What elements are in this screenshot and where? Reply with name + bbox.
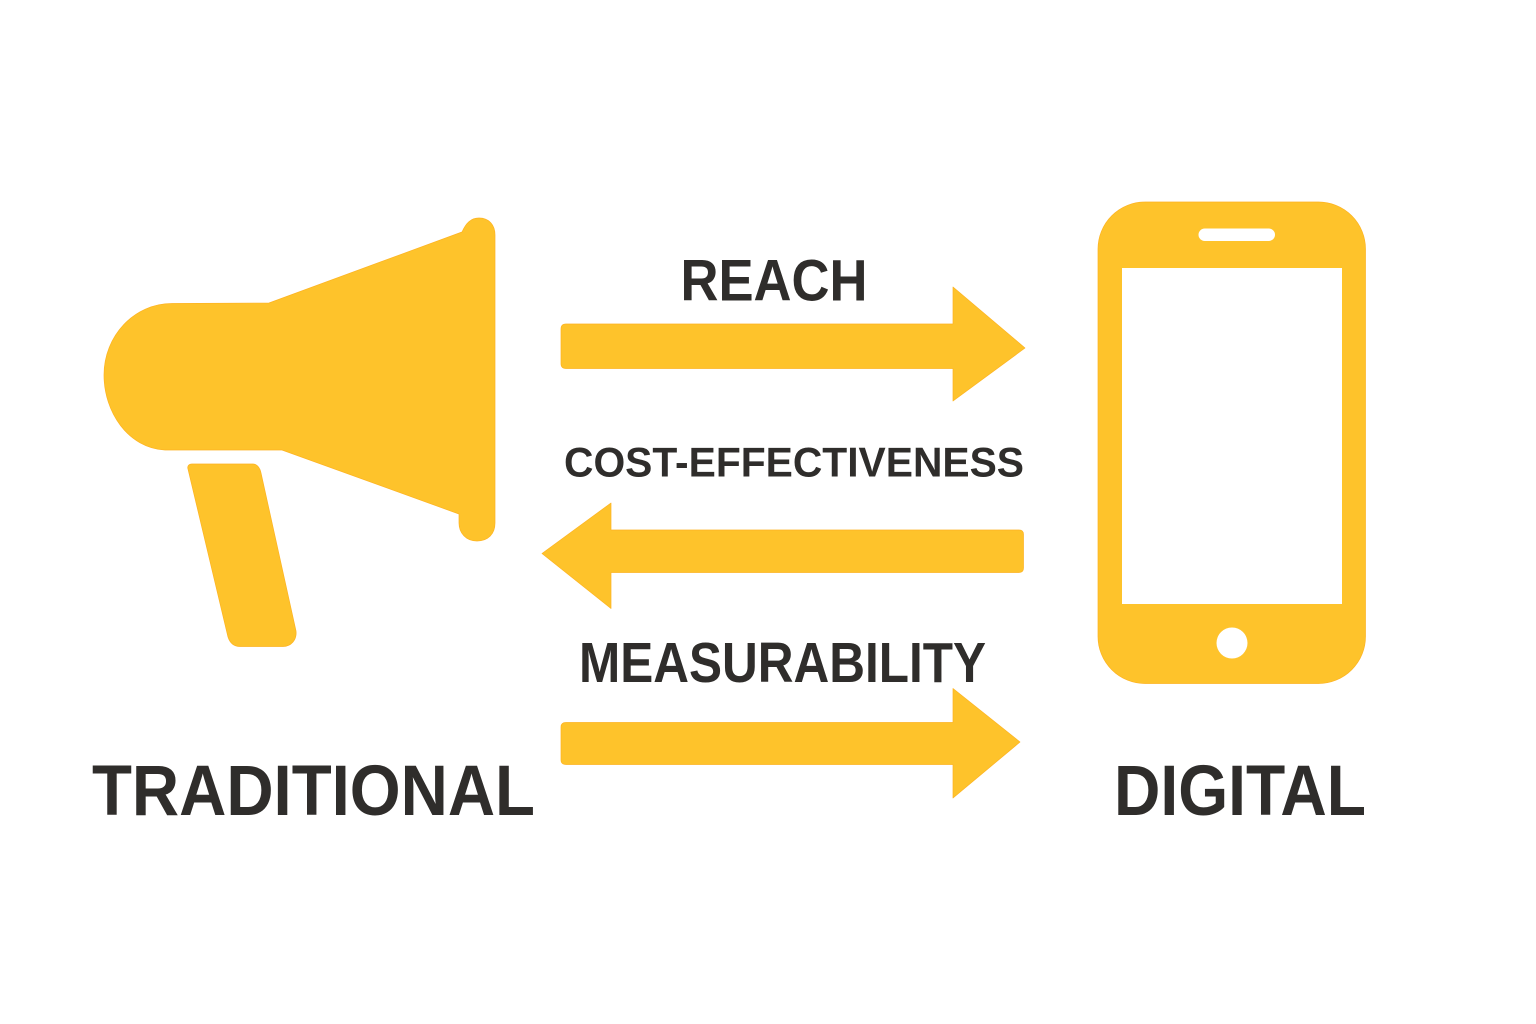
label: reach: REACH bbox=[680, 248, 868, 314]
label: measurability: MEASURABILITY bbox=[579, 631, 986, 695]
icon: smartphone bbox=[1098, 202, 1366, 684]
arrow: reach bbox=[561, 287, 1025, 401]
arrow: cost-effectiveness bbox=[542, 503, 1024, 608]
label: traditional: TRADITIONAL bbox=[92, 752, 535, 831]
icon: megaphone bbox=[104, 218, 495, 646]
label: digital: DIGITAL bbox=[1114, 752, 1366, 831]
label: cost-effectiveness: COST-EFFECTIVENESS bbox=[564, 438, 1024, 486]
arrow: measurability bbox=[561, 688, 1020, 798]
